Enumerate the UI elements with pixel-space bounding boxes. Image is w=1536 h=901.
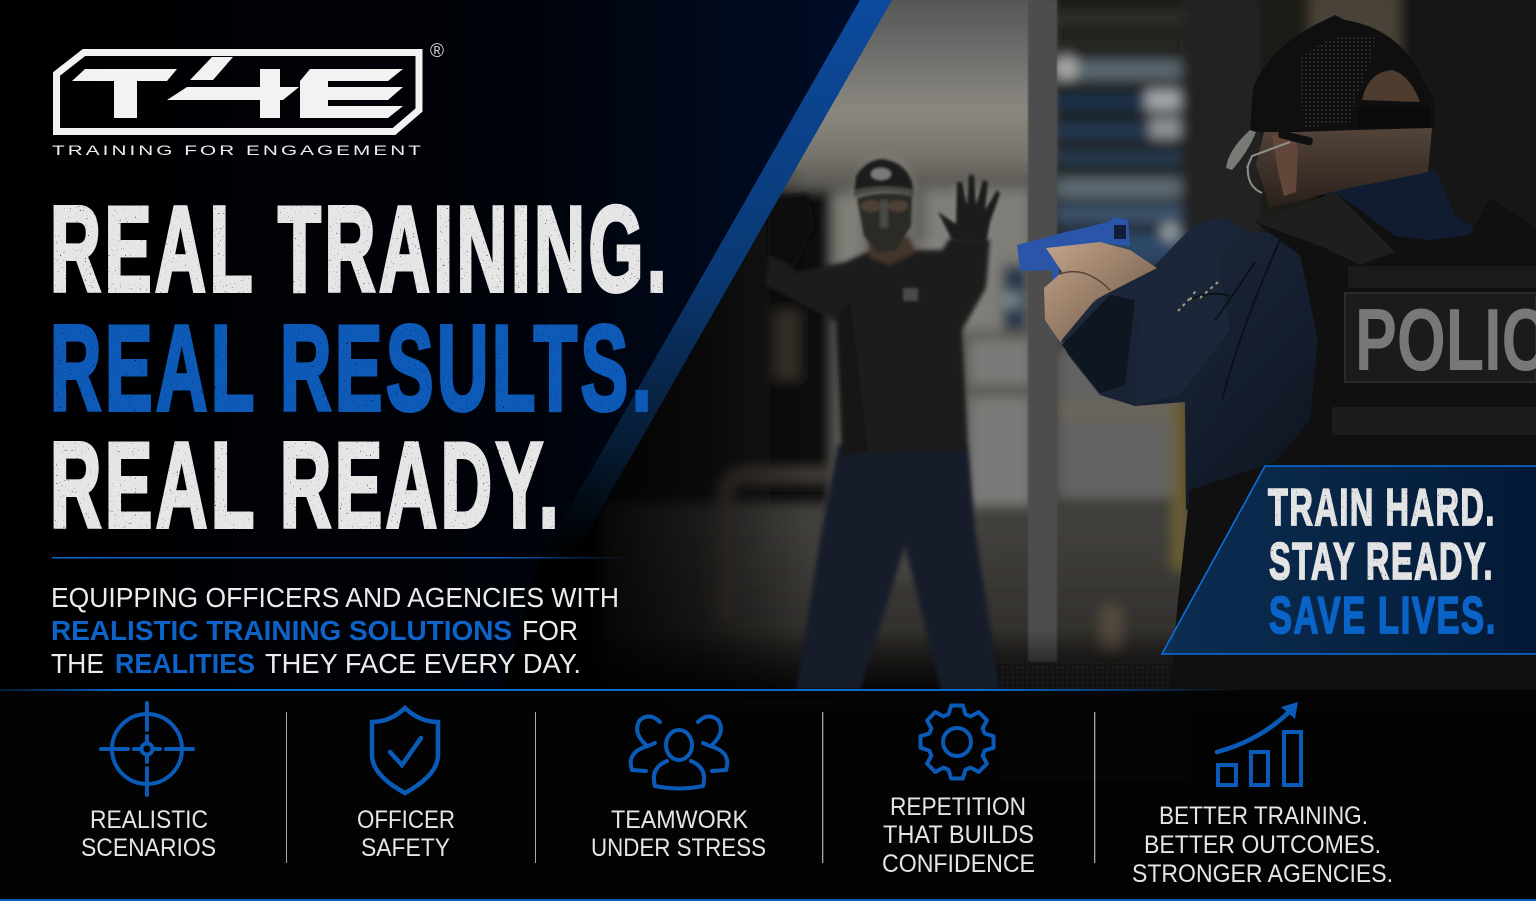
- label: UNDER STRESS: [591, 834, 766, 862]
- label: STRONGER AGENCIES.: [1132, 860, 1393, 888]
- cap: [1250, 15, 1434, 132]
- cap bill: [1226, 130, 1256, 170]
- headline line 2: REAL RESULTS.: [50, 300, 655, 436]
- neck and hair: [1256, 128, 1432, 208]
- label: THAT BUILDS: [883, 821, 1034, 849]
- left hand, out of focus: [768, 194, 815, 268]
- blue diagonal stripe: [540, 0, 892, 560]
- label: [1132, 802, 1393, 888]
- headline rule: [52, 557, 632, 558]
- pillar: [1028, 0, 1057, 662]
- subheading: THE: [51, 648, 104, 679]
- divider lines: [286, 712, 1095, 863]
- benefit: repetition that builds confidence: [882, 706, 1035, 878]
- label: REPETITION: [890, 793, 1026, 821]
- label: [882, 793, 1035, 878]
- icon: shield with check: [372, 708, 438, 793]
- dust marks on sleeve: [1178, 282, 1218, 311]
- numeral 4: [167, 57, 299, 118]
- floor mat: [1000, 662, 1190, 780]
- label: TEAMWORK: [611, 806, 748, 834]
- subheading: EQUIPPING OFFICERS AND AGENCIES WITH: [51, 582, 619, 613]
- headline line 3: REAL READY.: [50, 417, 562, 553]
- label: OFFICER: [357, 806, 455, 834]
- subheading: [51, 582, 619, 679]
- sweatshirt and arms: [765, 235, 990, 455]
- label: SCENARIOS: [81, 834, 216, 862]
- label: [591, 806, 766, 862]
- icon: group of people: [631, 716, 727, 788]
- callout: train hard: [1162, 466, 1536, 654]
- glasses: [1247, 142, 1290, 193]
- logo frame: [56, 52, 419, 132]
- label: BETTER OUTCOMES.: [1144, 831, 1381, 859]
- neck: [868, 236, 916, 265]
- subheading: REALISTIC TRAINING SOLUTIONS: [51, 615, 512, 646]
- officer seen from behind: [1017, 15, 1536, 690]
- blue training pistol: [1017, 217, 1130, 282]
- jeans: [796, 445, 1000, 695]
- sleeve and shirt: [1058, 218, 1330, 510]
- icon: crosshair target: [101, 703, 193, 795]
- label: [81, 806, 216, 862]
- mask: [857, 193, 912, 252]
- bottom rule: [0, 899, 1536, 901]
- benefit: officer safety: [357, 708, 455, 862]
- label: REALISTIC: [90, 806, 208, 834]
- vest: [1170, 192, 1536, 690]
- subheading: FOR: [522, 615, 578, 646]
- subheading: REALITIES: [115, 648, 255, 679]
- label: SAFETY: [361, 834, 450, 862]
- headline: [50, 181, 670, 553]
- police patch: [1345, 290, 1536, 389]
- letter E: [300, 69, 403, 118]
- raised right hand: [938, 175, 1000, 244]
- benefit: teamwork under stress: [591, 716, 766, 862]
- left dark panel: [0, 0, 862, 700]
- icon: rising bar chart with arrow: [1217, 702, 1301, 785]
- bottom band: [0, 690, 1536, 901]
- collar: [1320, 170, 1490, 240]
- registered mark: ®: [430, 41, 444, 62]
- letter T: [72, 69, 177, 118]
- hands: [1044, 242, 1157, 342]
- halo around figure: [845, 155, 1002, 320]
- benefit: realistic scenarios: [81, 703, 216, 862]
- label: [357, 806, 455, 862]
- cap: [854, 159, 914, 196]
- T4E logo: [52, 41, 444, 158]
- top rule of benefits band: [0, 689, 1240, 691]
- label: CONFIDENCE: [882, 850, 1035, 878]
- subheading: THEY FACE EVERY DAY.: [265, 648, 581, 679]
- shirt logo: [903, 288, 918, 301]
- ear: [1272, 134, 1298, 196]
- icon: gear: [920, 706, 994, 778]
- suspect figure, hands raised, blurred: [765, 155, 1002, 695]
- tagline: TRAINING FOR ENGAGEMENT: [52, 143, 424, 158]
- headline line 1: REAL TRAINING.: [50, 181, 670, 317]
- label: BETTER TRAINING.: [1159, 802, 1368, 830]
- benefit: better training: [1132, 702, 1393, 888]
